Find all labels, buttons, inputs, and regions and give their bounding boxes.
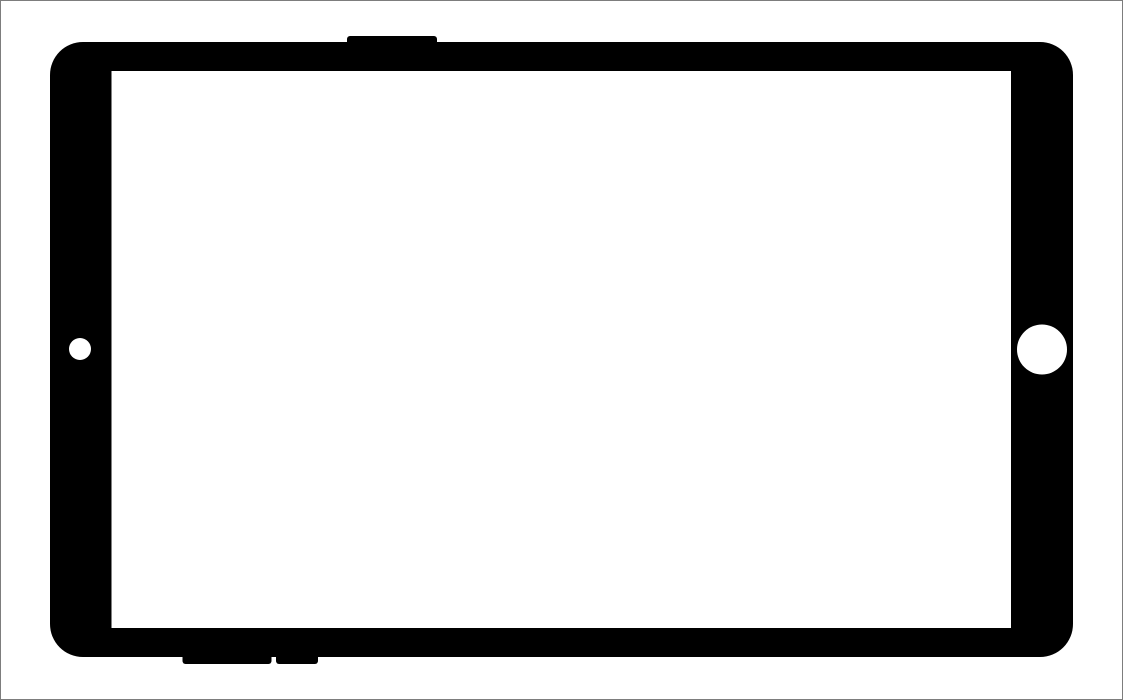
- bottom volume button left: [182, 650, 272, 664]
- tablet screen: [112, 71, 1011, 628]
- bottom volume button right: [276, 650, 318, 664]
- home button: [1017, 324, 1067, 374]
- front camera: [69, 338, 91, 360]
- top power button: [347, 36, 437, 48]
